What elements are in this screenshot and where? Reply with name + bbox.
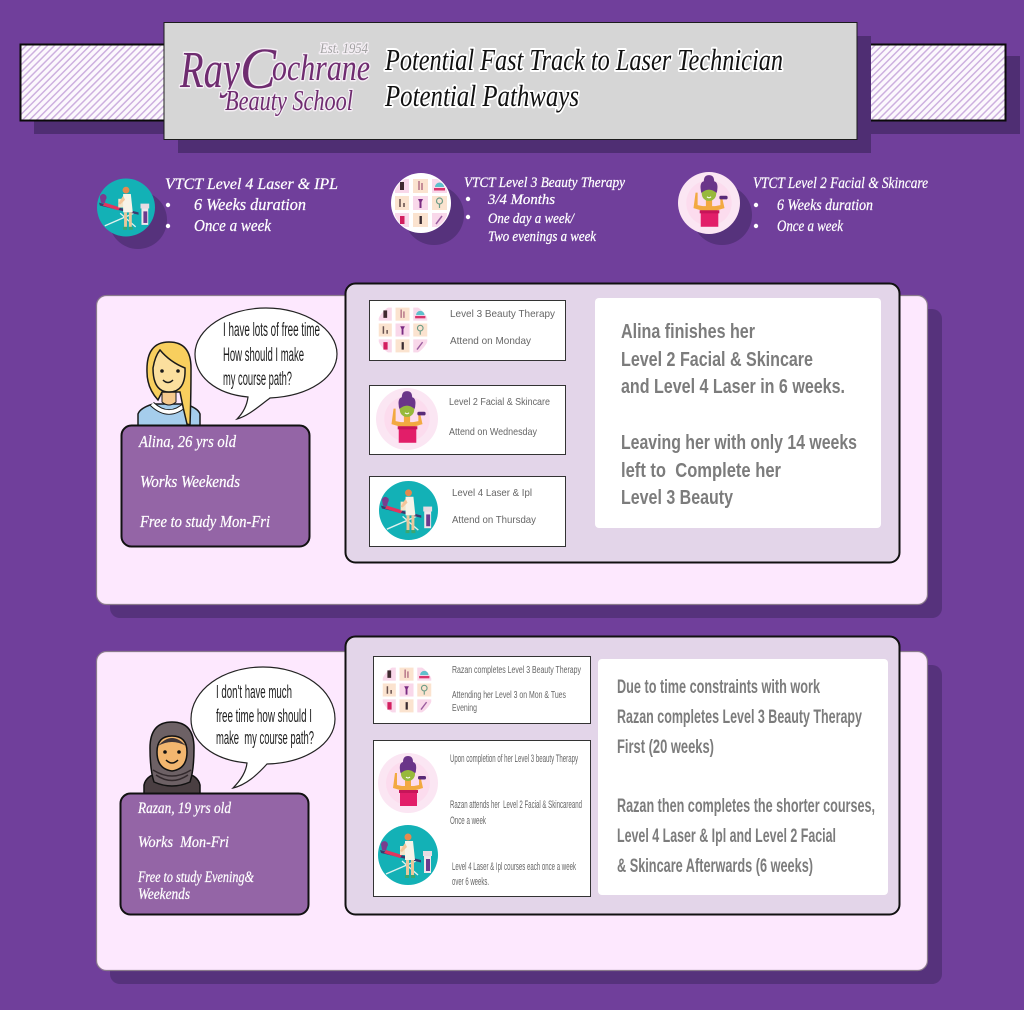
- schedule card: Level 3: Level 3 Beauty Therapy: [450, 308, 556, 320]
- profile box: Alina: [122, 426, 310, 546]
- schedule card: Level 3: [370, 300, 566, 360]
- course details: 3/4 Months: [487, 192, 555, 208]
- schedule panel: Razan: [346, 636, 900, 914]
- schedule card: Level 2: Level 2 Facial & Skincare: [449, 396, 550, 408]
- outcome text: Razan: Due to time constraints with work: [617, 677, 820, 698]
- outcome text: Razan: First (20 weeks): [617, 737, 714, 758]
- logo: Ray Cochrane Beauty School: Beauty School: [225, 85, 353, 117]
- schedule card: Level 2 and Level 4: over 6 weeks.: [452, 876, 489, 888]
- title: Potential Fast Track to Laser Technician: [384, 42, 783, 77]
- outcome text: Alina: Level 2 Facial & Skincare: [621, 349, 813, 371]
- course details: [753, 175, 928, 235]
- course details: VTCT Level 3 Beauty Therapy: [464, 175, 625, 191]
- speech bubble: Alina: [195, 308, 337, 419]
- schedule card: Level 3 first: Attending her Level 3 on Mon & Tues: [452, 690, 566, 701]
- character: Razan: [144, 722, 200, 794]
- profile box: Alina: Works Weekends: [140, 472, 240, 491]
- speech bubble: Alina: How should I make: [223, 345, 304, 366]
- course details: Once a week: [194, 216, 271, 235]
- speech bubble: Alina: I have lots of free time: [223, 320, 320, 341]
- course summary: Level 3 Beauty Therapy: [391, 173, 625, 245]
- outcome text: Alina: [595, 298, 881, 528]
- speech bubble: Razan: I don't have much: [216, 682, 292, 702]
- schedule card: Level 2 and Level 4: [374, 740, 590, 896]
- profile box: Razan: Free to study Evening&: [137, 869, 254, 886]
- outcome text: Alina: and Level 4 Laser in 6 weeks.: [621, 376, 845, 398]
- logo: Ray Cochrane Beauty School: Ray: [179, 42, 241, 99]
- outcome text: Razan: Razan completes Level 3 Beauty Therapy: [617, 707, 862, 728]
- profile box: Alina: Alina, 26 yrs old: [138, 432, 236, 451]
- schedule card: Level 3 first: [374, 656, 590, 724]
- course summary: Level 2 Facial and Skincare: [678, 172, 928, 245]
- course details: [464, 175, 625, 245]
- course details: Once a week: [777, 218, 844, 235]
- course details: VTCT Level 2 Facial & Skincare: [753, 175, 928, 192]
- profile box: Razan: Weekends: [138, 886, 190, 903]
- logo: Ray Cochrane Beauty School: [179, 36, 370, 117]
- outcome text: Razan: [598, 659, 888, 895]
- profile box: Razan: [120, 794, 308, 914]
- schedule card: Level 2: Attend on Wednesday: [449, 426, 538, 438]
- schedule card: Level 2: [370, 386, 566, 454]
- logo: Ray Cochrane Beauty School: ochrane: [272, 48, 370, 89]
- character: Alina: [138, 342, 200, 426]
- schedule card: Level 2 and Level 4: Razan attends her Level 2 Facial & Skincareand: [450, 799, 582, 811]
- schedule card: Level 4: Attend on Thursday: [452, 514, 537, 526]
- course details: Two evenings a week: [488, 229, 596, 245]
- title: [384, 42, 783, 113]
- schedule panel: Alina: [346, 284, 900, 562]
- schedule card: Level 2 and Level 4: Once a week: [450, 815, 486, 827]
- outcome text: Alina: Level 3 Beauty: [621, 487, 734, 509]
- outcome text: Razan: Razan then completes the shorter courses,: [617, 796, 875, 817]
- outcome text: Razan: Level 4 Laser & Ipl and Level 2 Facial: [617, 826, 836, 847]
- schedule card: Level 3 first: Razan completes Level 3 Beauty Therapy: [452, 665, 581, 676]
- logo: Ray Cochrane Beauty School: C: [240, 36, 277, 101]
- course details: One day a week/: [488, 211, 576, 227]
- icon: facial treatment: [678, 172, 752, 245]
- schedule card: Level 2 and Level 4: Level 4 Laser & Ipl courses each once a week: [452, 861, 576, 873]
- profile box: Razan: Works Mon-Fri: [138, 834, 229, 851]
- icon: beauty products: [391, 173, 464, 245]
- schedule card: Level 3 first: Evening: [452, 703, 477, 714]
- outcome text: Alina: Alina finishes her: [621, 321, 755, 343]
- icon: laser treatment: [97, 178, 167, 249]
- logo: Ray Cochrane Beauty School: Est. 1954: [319, 41, 368, 57]
- speech bubble: Razan: free time how should I: [216, 706, 312, 726]
- outcome text: Alina: left to Complete her: [621, 460, 781, 482]
- outcome text: Alina: Leaving her with only 14 weeks: [621, 432, 857, 454]
- speech bubble: Alina: my course path?: [223, 369, 292, 390]
- course details: [165, 176, 338, 235]
- schedule card: Level 4: Level 4 Laser & Ipl: [452, 487, 532, 499]
- schedule card: Level 3: Attend on Monday: [450, 335, 532, 347]
- speech bubble: Razan: make my course path?: [216, 728, 314, 748]
- panel: Razan: [96, 636, 942, 984]
- speech bubble: Razan: [191, 667, 335, 788]
- panel: Alina: [96, 284, 942, 618]
- outcome text: Razan: & Skincare Afterwards (6 weeks): [617, 856, 813, 877]
- course summary: Level 4 Laser and IPL: [97, 176, 338, 249]
- profile box: Razan: Razan, 19 yrs old: [137, 800, 232, 817]
- course details: VTCT Level 4 Laser & IPL: [165, 176, 338, 193]
- profile box: Alina: Free to study Mon-Fri: [139, 512, 270, 531]
- course details: 6 Weeks duration: [194, 195, 306, 214]
- schedule card: Level 4: [370, 476, 566, 546]
- schedule card: Level 2 and Level 4: Upon completion of her Level 3 beauty Therapy: [450, 753, 578, 765]
- header banner: [20, 22, 1020, 153]
- course details: 6 Weeks duration: [777, 197, 873, 214]
- title: Potential Pathways: [384, 78, 579, 113]
